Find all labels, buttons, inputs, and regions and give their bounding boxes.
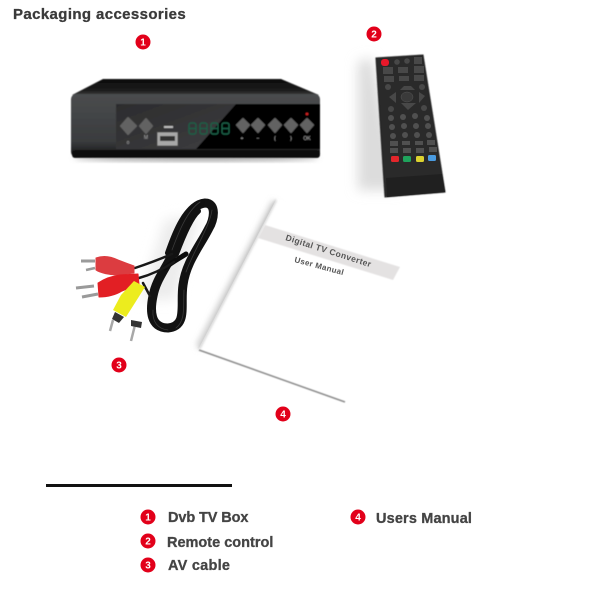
icon: badge 3 — [112, 358, 126, 372]
legend item 1: Dvb TV Box — [168, 510, 248, 526]
front labels: + — [241, 136, 244, 142]
icon: badge 1 — [136, 34, 150, 50]
AV cable illustration — [76, 202, 213, 341]
legend item 3 — [140, 558, 230, 574]
legend item 4: 4 — [355, 512, 361, 524]
front labels: − — [257, 136, 260, 142]
legend item 3: 3 — [145, 560, 151, 572]
icon: badge 2: 2 — [371, 30, 377, 40]
front labels: M — [144, 135, 148, 141]
legend item 1: 1 — [145, 512, 151, 524]
usb port — [157, 132, 178, 146]
icon: badge 4 — [276, 406, 290, 422]
manual title: Digital TV Converter — [284, 232, 373, 269]
cable coil — [135, 202, 213, 330]
legend item 3: AV cable — [168, 558, 230, 574]
TV box illustration — [71, 79, 320, 161]
manual subtitle: User Manual — [293, 255, 345, 277]
front labels — [127, 135, 311, 146]
icon: badge 2 — [366, 26, 382, 42]
colour keys — [391, 156, 399, 162]
divider line — [46, 484, 232, 487]
front labels: ( — [274, 136, 276, 142]
user manual illustration — [196, 198, 420, 402]
plugs — [76, 257, 145, 341]
band — [258, 225, 400, 280]
icon: badge 1: 1 — [140, 38, 146, 48]
buttons — [121, 118, 313, 134]
front labels: ) — [290, 136, 292, 142]
front labels: OK — [303, 136, 311, 142]
legend item 2: Remote control — [167, 535, 273, 551]
title: Packaging accessories — [13, 6, 186, 23]
front labels: o — [127, 140, 130, 146]
legend item 4: Users Manual — [376, 511, 472, 527]
display digits — [189, 123, 229, 134]
legend — [140, 510, 472, 574]
legend item 2: 2 — [145, 536, 151, 548]
remote control illustration — [358, 55, 445, 197]
icon: badge 3: 3 — [116, 360, 122, 372]
icon: badge 4: 4 — [280, 410, 286, 420]
